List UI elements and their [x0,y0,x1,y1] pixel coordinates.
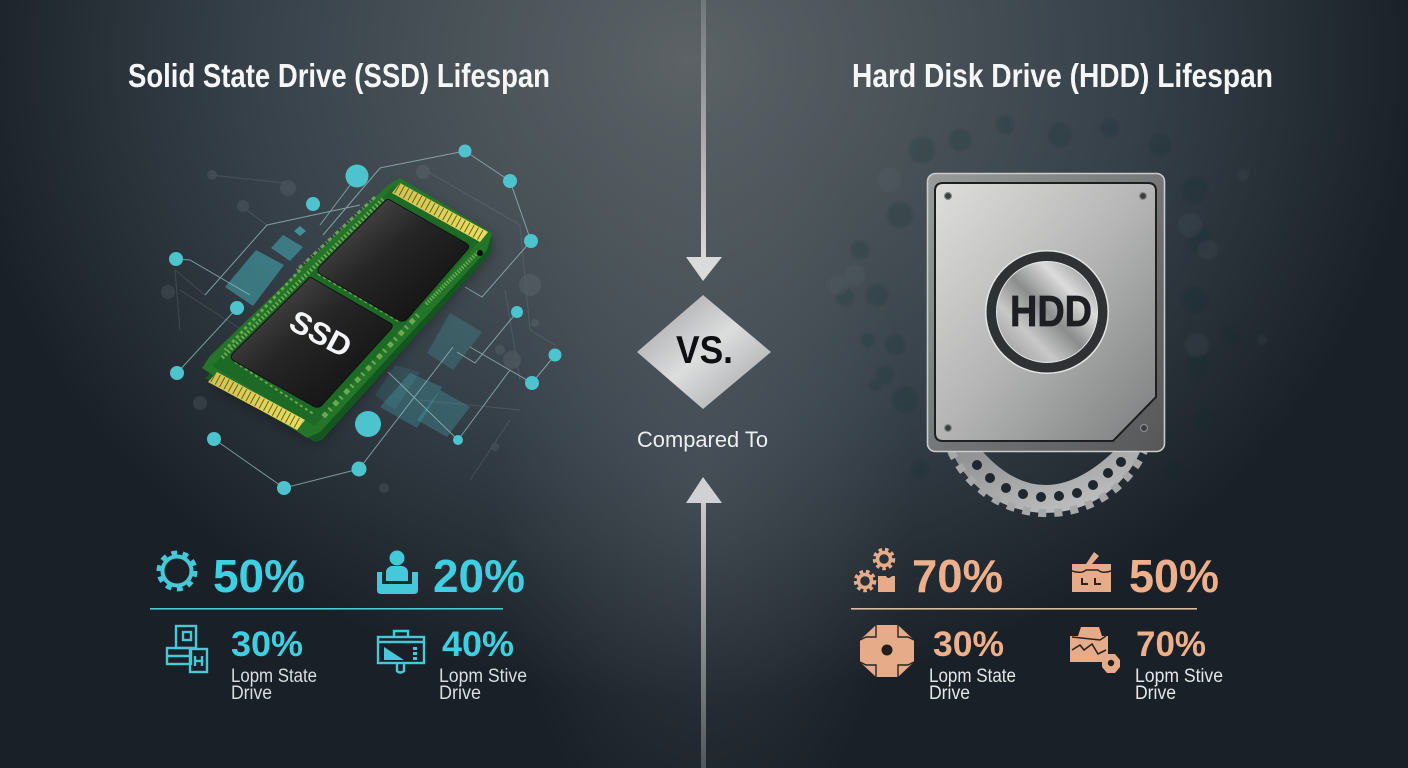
stat: 40% with gauge icon: Lopm Stive [439,666,527,687]
teal connector lines [176,151,555,488]
drive plate [935,183,1156,441]
gold connector bottom [208,372,305,430]
stat: 50% with gear icon [159,550,305,602]
stat: 70% with cracked folder icon: Lopm Stive [1135,666,1223,687]
stat: 30% with octagon icon [860,625,1016,704]
memory chip: lower ssd: SSD [284,303,358,365]
vs diamond [637,295,771,409]
stat: 30% with blocks icon: 30% [231,625,303,664]
ssd stats panel [150,550,527,704]
screws [944,192,1148,432]
stat: 40% with gauge icon [378,625,527,704]
arrow: top pointing down [686,0,722,281]
memory chip: lower ssd [231,277,392,407]
stat: 50% with gear icon: 50% [213,550,305,602]
stat: 40% with gauge icon: 40% [442,625,514,664]
gold connector top [392,183,488,242]
stat: 30% with blocks icon: Drive [231,683,272,704]
stat: 70% with cracked folder icon: Drive [1135,683,1176,704]
vs diamond: VS. [676,329,733,372]
circuit board [202,178,492,442]
stat: 20% with user tray icon [377,550,525,602]
ssd divider [150,608,503,610]
title: ssd: Solid State Drive (SSD) Lifespan [128,57,550,94]
stat: 70% with cracked folder icon: 70% [1136,625,1206,664]
hdd stats panel [851,550,1223,704]
hdd background texture [828,116,1267,479]
stat: 40% with gauge icon: Drive [439,683,481,704]
title: hdd: Hard Disk Drive (HDD) Lifespan [852,57,1273,94]
memory chip: upper [318,199,469,321]
stat: 20% with user tray icon: 20% [433,550,525,602]
hdd divider [851,608,1197,610]
hdd illustration [928,174,1164,513]
stat: 70% with cracked folder icon [1070,625,1223,704]
stat: 30% with octagon icon: 30% [933,625,1004,664]
center divider with arrows [686,0,722,768]
stat: 50% with toolbox icon: 50% [1129,550,1219,602]
stat: 70% with gears icon [856,550,1003,602]
teal nodes [169,144,562,495]
arrow: bottom pointing up [686,477,722,768]
stat: 50% with toolbox icon [1072,550,1219,602]
faint network [161,165,555,493]
stat: 30% with octagon icon: Lopm State [929,666,1016,687]
hdd badge: HDD [1010,287,1092,336]
stat: 70% with gears icon: 70% [912,550,1003,602]
drive casing [928,174,1164,452]
board traces [222,197,478,418]
stat: 30% with octagon icon: Drive [929,683,970,704]
compared to label: Compared To [637,427,768,452]
gear arc [951,451,1144,513]
hdd badge [985,250,1109,374]
teal translucent panels [225,226,482,437]
stat: 30% with blocks icon: Lopm State [231,666,317,687]
stat: 30% with blocks icon [167,625,317,704]
ssd illustration [161,144,562,495]
